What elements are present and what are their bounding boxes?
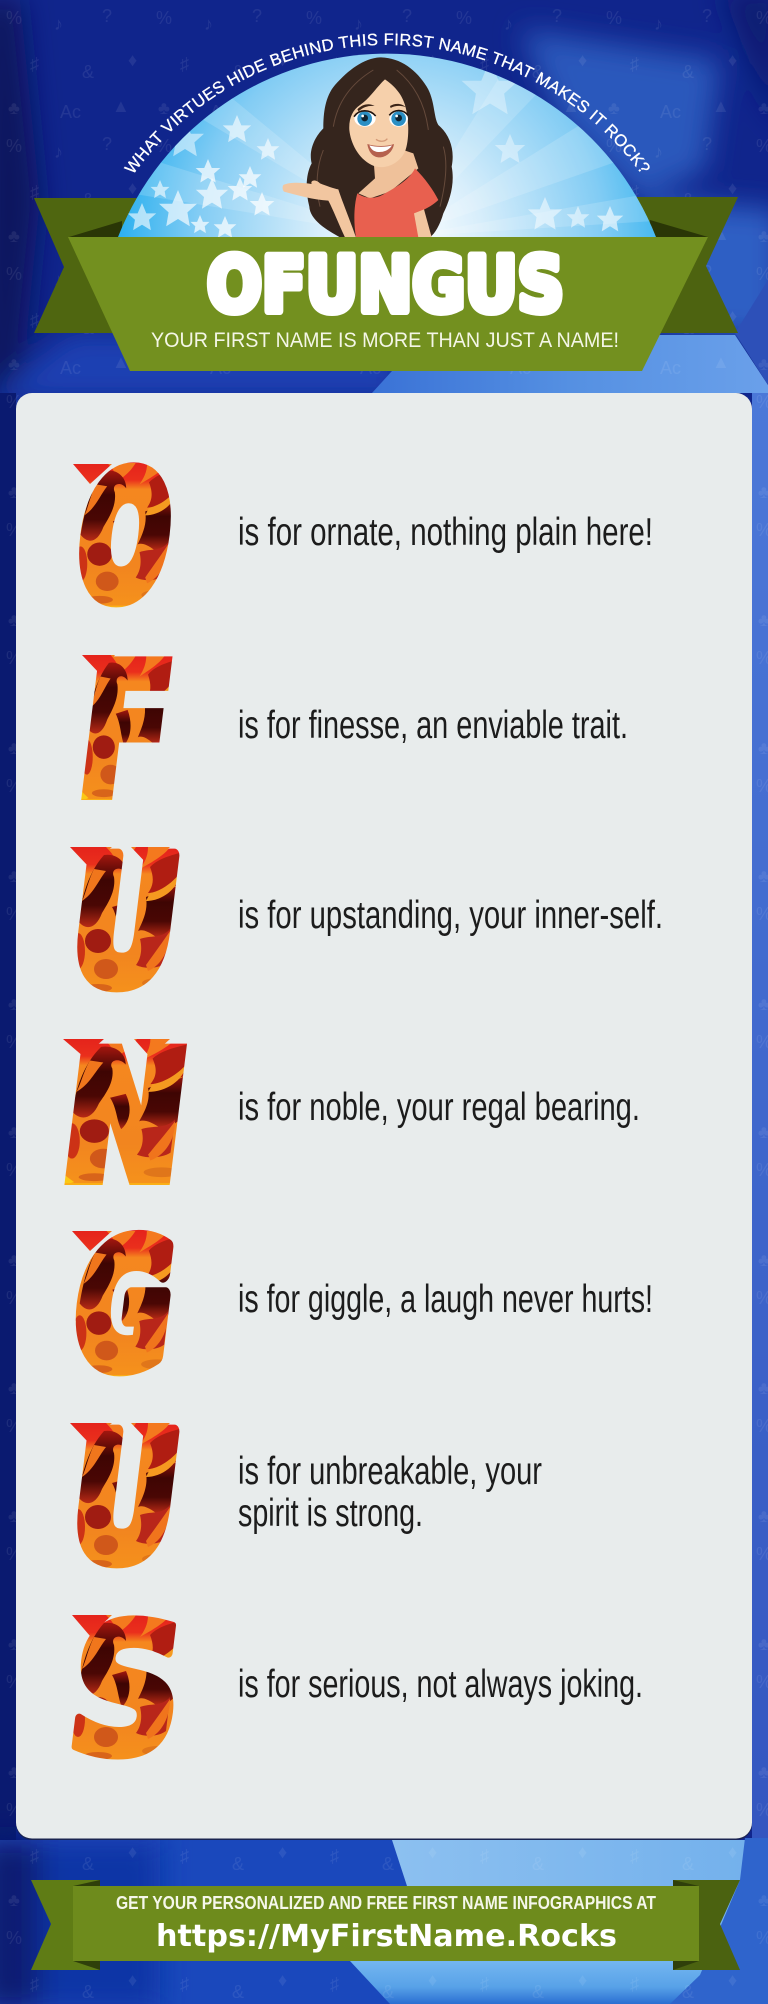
mouth (367, 144, 394, 157)
letter O (73, 462, 171, 608)
letter U (70, 847, 180, 992)
main ribbon (68, 237, 708, 371)
name heading: OFUNGUS (207, 240, 564, 329)
right arm (414, 209, 432, 237)
eyebrows (357, 104, 406, 111)
arm and hand (283, 180, 356, 237)
subtitle: YOUR FIRST NAME IS MORE THAN JUST A NAME! (151, 329, 619, 352)
text lines U second: spirit is strong. (238, 1492, 423, 1535)
banner call to action: GET YOUR PERSONALIZED AND FREE FIRST NAME INFOGRAPHICS AT (116, 1893, 656, 1913)
arc tagline: WHAT VIRTUES HIDE BEHIND THIS FIRST NAME THAT MAKES IT ROCK? (124, 33, 650, 172)
neck and chest (358, 150, 418, 198)
nose (376, 139, 387, 141)
text lines U second: is for unbreakable, your (238, 1450, 542, 1493)
letter U second (70, 1423, 180, 1568)
panel: letters and meanings (16, 393, 752, 1840)
letter S (72, 1615, 176, 1760)
eyes (354, 111, 408, 127)
text lines U second (238, 1450, 542, 1535)
dome with starburst (118, 54, 656, 237)
letter F (81, 655, 172, 800)
shirt (354, 168, 438, 237)
letter G (72, 1230, 174, 1376)
letter N (63, 1039, 187, 1185)
face (349, 79, 408, 167)
text line F: is for finesse, an enviable trait. (238, 704, 628, 747)
banner url: https://MyFirstName.Rocks (156, 1919, 617, 1954)
hair (307, 57, 453, 237)
ribbon tails (34, 197, 738, 333)
text line N: is for noble, your regal bearing. (238, 1086, 640, 1129)
bottom banner (31, 1880, 740, 1970)
character: woman presenting (283, 57, 453, 237)
